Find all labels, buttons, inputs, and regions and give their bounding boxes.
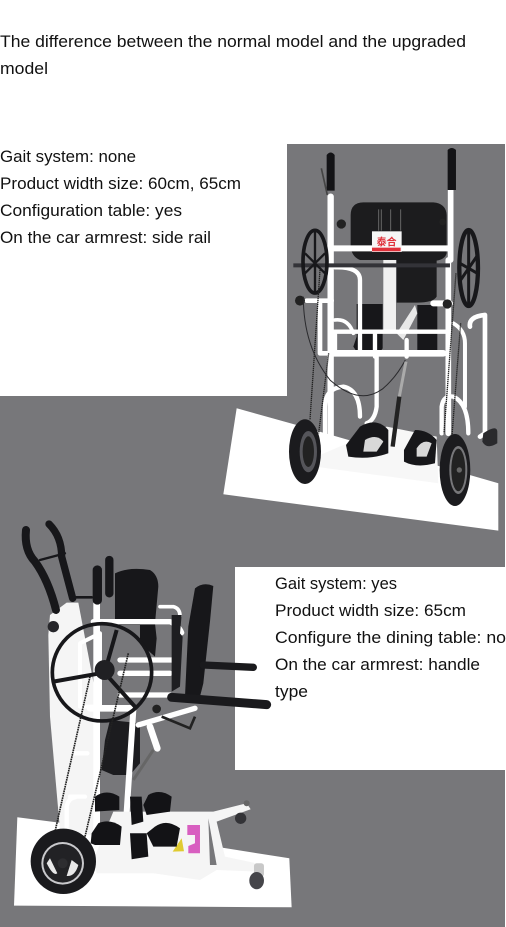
product photo: normal model walker: 泰合 [377,233,397,248]
text block: upgraded model specs: type [275,682,308,701]
main upright white panel [48,603,100,837]
large wheel [31,829,96,894]
knee cushion [102,720,140,775]
text block: upgraded model specs: Gait system: yes [275,574,397,593]
lever arm [162,717,195,728]
text block: normal model specs: Product width size: 60cm, 65cm [0,174,241,193]
large wheels [289,419,321,484]
knee pads [353,304,383,357]
padded backrest [115,569,158,657]
panel: upgraded model specs [235,567,506,770]
text block: normal model specs: Configuration table: yes [0,201,182,220]
text block: normal model specs: Gait system: none [0,147,136,166]
title [0,32,466,78]
foot straps [91,792,180,859]
product photo: upgraded model walker [14,524,292,907]
white frame [307,190,485,450]
footplate [315,427,438,483]
gas spring [133,750,153,780]
warning labels [187,825,200,853]
frame tubes [67,603,195,863]
text block: upgraded model specs: Product width size: 65cm [275,601,466,620]
text block: upgraded model specs: On the car armrest: handle [275,655,480,674]
base frame [93,803,263,880]
adjustment slots [379,209,401,231]
white floor patch [14,817,292,907]
tray bar [293,263,450,267]
center column [383,260,396,333]
text block: normal model specs [0,147,241,247]
front casters [235,813,246,824]
small caster [482,428,497,446]
grips [327,152,335,191]
gas spring [399,362,406,397]
knobs [48,621,59,632]
knobs [337,219,346,229]
seat back [351,202,447,303]
foot straps [346,422,388,458]
padded chest support [185,584,213,697]
title: The difference between the normal model and the upgraded [0,32,466,51]
upgraded model handles overlapping panel [172,665,267,705]
chains [55,653,128,837]
label plate [372,231,402,252]
top grips [26,524,109,610]
hand wheels [303,230,478,306]
title: model [0,59,48,78]
white floor patch [223,408,498,531]
hand wheel [52,624,152,721]
text block: upgraded model specs: Configure the dining table: no [275,628,506,647]
text block: normal model specs: On the car armrest: side rail [0,228,211,247]
chains and cable [303,270,461,440]
product photo: normal model walker [223,148,498,531]
text block: upgraded model specs [275,574,506,701]
armrest pad [172,615,183,692]
